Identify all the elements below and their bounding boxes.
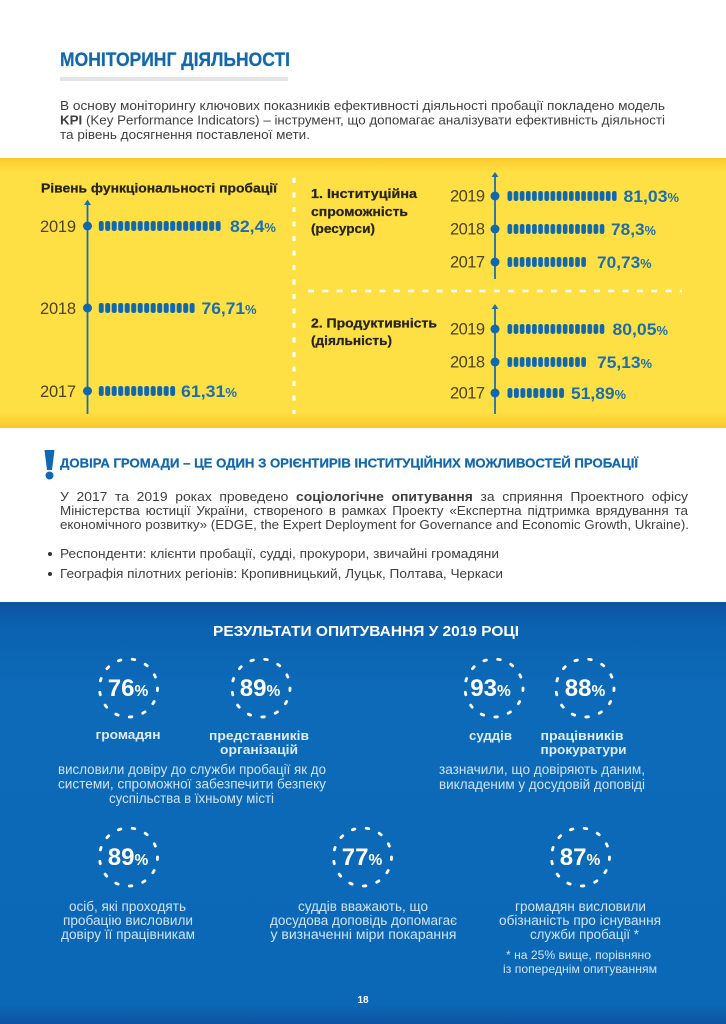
chart: productivity: 51,89% <box>571 384 626 403</box>
stat: 88%: працівників <box>540 728 624 743</box>
survey paragraph: економічного розвитку» (EDGE, the Expert Deployment for Governance and Economic Growth, Ukraine). <box>60 517 689 532</box>
stat: 88%: 88% <box>565 675 605 702</box>
stat: 77% <box>270 828 457 942</box>
chart: functionality level: 2017 <box>40 383 76 401</box>
chart: institutional capacity <box>311 172 679 279</box>
chart: functionality level: Рівень функціональності пробації <box>41 180 277 196</box>
chart: institutional capacity: спроможність <box>311 204 408 219</box>
text: trust in service: висловили довіру до служби пробації як до <box>58 762 326 777</box>
chart: productivity: (діяльність) <box>311 333 392 348</box>
footnote: * на 25% вище, порівняно <box>506 950 651 962</box>
text: trust in service: суспільства в їхньому місті <box>109 791 274 806</box>
chart: productivity: 75,13% <box>597 353 652 372</box>
survey paragraph: У 2017 та 2019 роках проведено соціологічне опитування за сприяння Проектного офісу <box>60 489 689 504</box>
chart: productivity: 2. Продуктивність <box>311 316 437 330</box>
stat: 76%: 76% <box>108 675 148 702</box>
text: trust in service: системи, спроможної забезпечити безпеку <box>58 776 326 792</box>
stat: 77%: 77% <box>342 844 382 871</box>
chart: functionality level: 76,71% <box>202 299 256 318</box>
chart: productivity: 80,05% <box>612 320 668 339</box>
stat: 88%: прокуратури <box>540 742 627 757</box>
chart: institutional capacity: 2018 <box>450 220 485 238</box>
chart: functionality level: 2018 <box>40 300 76 318</box>
stat: 93%: 93% <box>470 675 511 702</box>
intro text: В основу моніторингу ключових показників ефективності діяльності пробації покладено модель <box>60 98 665 113</box>
stat: 77%: досудова доповідь допомагає <box>270 913 457 928</box>
page number: 18 <box>357 995 369 1006</box>
survey paragraph <box>60 489 689 532</box>
chart: functionality level: 2019 <box>40 218 76 236</box>
stat: 89% <box>209 659 309 757</box>
stat: 87%: обізнаність про існування <box>499 913 661 928</box>
footnote: із попереднім опитуванням <box>503 964 657 976</box>
chart: functionality level: 82,4% <box>230 217 276 236</box>
chart: functionality level <box>40 180 277 414</box>
stat: 89% persons <box>61 828 195 942</box>
chart: functionality level: 61,31% <box>181 382 237 401</box>
bullet list <box>48 546 503 581</box>
chart: productivity <box>311 304 668 414</box>
chart: productivity: 2018 <box>450 354 485 372</box>
panel: yellow KPI band <box>0 158 726 428</box>
chart: institutional capacity: 70,73% <box>597 253 652 272</box>
intro text: KPI (Key Performance Indicators) – інструмент, що допомагає аналізувати ефективність діяльності <box>60 112 665 128</box>
panel: survey results <box>0 602 726 1024</box>
chart: institutional capacity: 2019 <box>450 188 485 206</box>
bullet list: Респонденти: клієнти пробації, судді, прокурори, звичайні громадяни <box>60 546 499 561</box>
stat: 76% <box>96 659 160 742</box>
stat: 87%: громадян висловили <box>515 899 646 914</box>
survey paragraph: Міністерства юстиції України, створеного в рамках Проекту «Експертна підтримка врядування та <box>60 503 689 518</box>
stat: 77%: у визначенні міри покарання <box>270 927 456 942</box>
stat: 93% <box>465 659 523 743</box>
stat: 77%: суддів вважають, що <box>298 899 428 914</box>
stat: 93%: суддів <box>469 728 512 743</box>
stat: 89%: організацій <box>220 742 298 757</box>
stat: 89% persons: пробацію висловили <box>63 913 193 928</box>
heading: community trust: ДОВІРА ГРОМАДИ – ЦЕ ОДИН З ОРІЄНТИРІВ ІНСТИТУЦІЙНИХ МОЖЛИВОСТЕЙ ПРОБАЦІЇ <box>60 456 638 470</box>
bullet list: Географія пілотних регіонів: Кропивницький, Луцьк, Полтава, Черкаси <box>60 566 503 581</box>
heading: results: РЕЗУЛЬТАТИ ОПИТУВАННЯ У 2019 РОЦІ <box>213 624 519 640</box>
chart: productivity: 2019 <box>450 320 485 338</box>
intro text <box>60 98 665 142</box>
chart: institutional capacity: 78,3% <box>611 220 656 239</box>
divider vertical <box>292 178 296 414</box>
chart: institutional capacity: 1. Інституційна <box>311 186 418 201</box>
stat: 76%: громадян <box>96 727 160 742</box>
icon: exclamation mark <box>44 450 54 480</box>
chart: productivity: 2017 <box>450 384 485 402</box>
intro text: та рівень досягнення поставленої мети. <box>60 127 310 142</box>
stat: 88% <box>540 659 627 757</box>
stat: 87%: 87% <box>560 844 600 871</box>
title <box>60 50 290 81</box>
stat: 89% persons: довіру її працівникам <box>61 927 195 942</box>
stat: 89%: 89% <box>240 675 280 702</box>
stat: 89% persons: 89% <box>108 844 148 871</box>
text: trust in service <box>58 762 326 806</box>
text: trust data: викладеним у досудовій доповіді <box>439 777 645 792</box>
stat: 89% persons: осіб, які проходять <box>69 899 186 914</box>
chart: institutional capacity: 2017 <box>450 254 485 272</box>
chart: institutional capacity: (ресурси) <box>311 221 375 236</box>
chart: institutional capacity: 81,03% <box>624 187 679 206</box>
stat: 87%: служби пробації * <box>530 927 640 942</box>
text: trust data <box>439 762 645 792</box>
text: trust data: зазначили, що довіряють даним, <box>439 762 645 777</box>
stat: 89%: представників <box>209 728 309 743</box>
footnote <box>503 950 657 976</box>
stat: 87% <box>499 828 661 976</box>
title: МОНІТОРИНГ ДІЯЛЬНОСТІ <box>60 50 290 71</box>
